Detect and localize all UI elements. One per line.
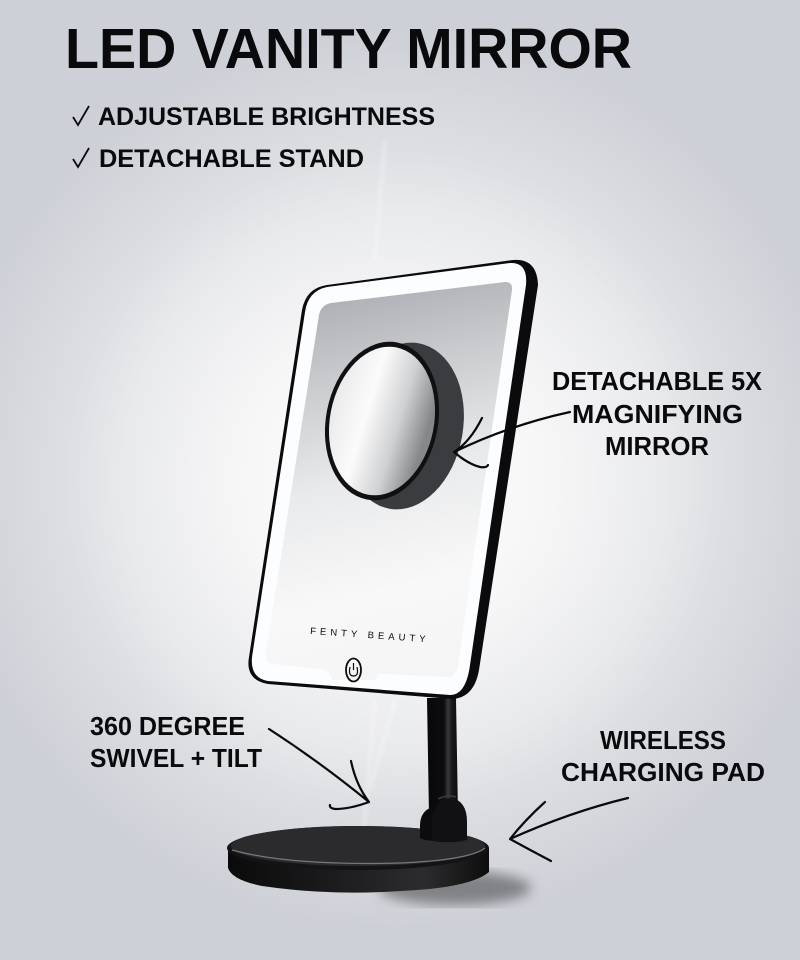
brand wordmark: FENTY BEAUTY xyxy=(310,626,430,645)
arrow xyxy=(269,729,369,809)
mirror glass xyxy=(266,282,512,680)
stand pole and swivel joint xyxy=(420,698,467,842)
product: mirror on stand xyxy=(227,260,538,905)
label: WIRELESS xyxy=(600,725,726,755)
arrow xyxy=(510,798,628,861)
label: MIRROR xyxy=(605,431,709,461)
feature: adjustable brightness: ADJUSTABLE BRIGHTNESS xyxy=(98,103,435,131)
label: DETACHABLE 5X xyxy=(552,366,763,396)
feature list xyxy=(73,103,435,173)
mirror frame xyxy=(248,260,538,699)
title: LED VANITY MIRROR xyxy=(65,17,632,81)
label: MAGNIFYING xyxy=(572,399,743,429)
callout: magnifying mirror xyxy=(454,366,763,467)
feature: detachable stand: DETACHABLE STAND xyxy=(99,145,364,173)
icon: power button xyxy=(346,658,361,682)
base shadow xyxy=(379,871,531,905)
magnifying mirror xyxy=(312,332,477,519)
callout: swivel and tilt xyxy=(90,711,369,809)
label: SWIVEL + TILT xyxy=(90,743,262,773)
LED light ring xyxy=(252,263,526,695)
arrow xyxy=(454,412,570,467)
label: CHARGING PAD xyxy=(561,757,765,787)
label xyxy=(90,711,262,773)
label: 360 DEGREE xyxy=(90,711,245,741)
stand base xyxy=(227,826,489,893)
callout: wireless charging pad xyxy=(510,725,765,861)
label xyxy=(552,366,763,461)
label xyxy=(561,725,765,787)
